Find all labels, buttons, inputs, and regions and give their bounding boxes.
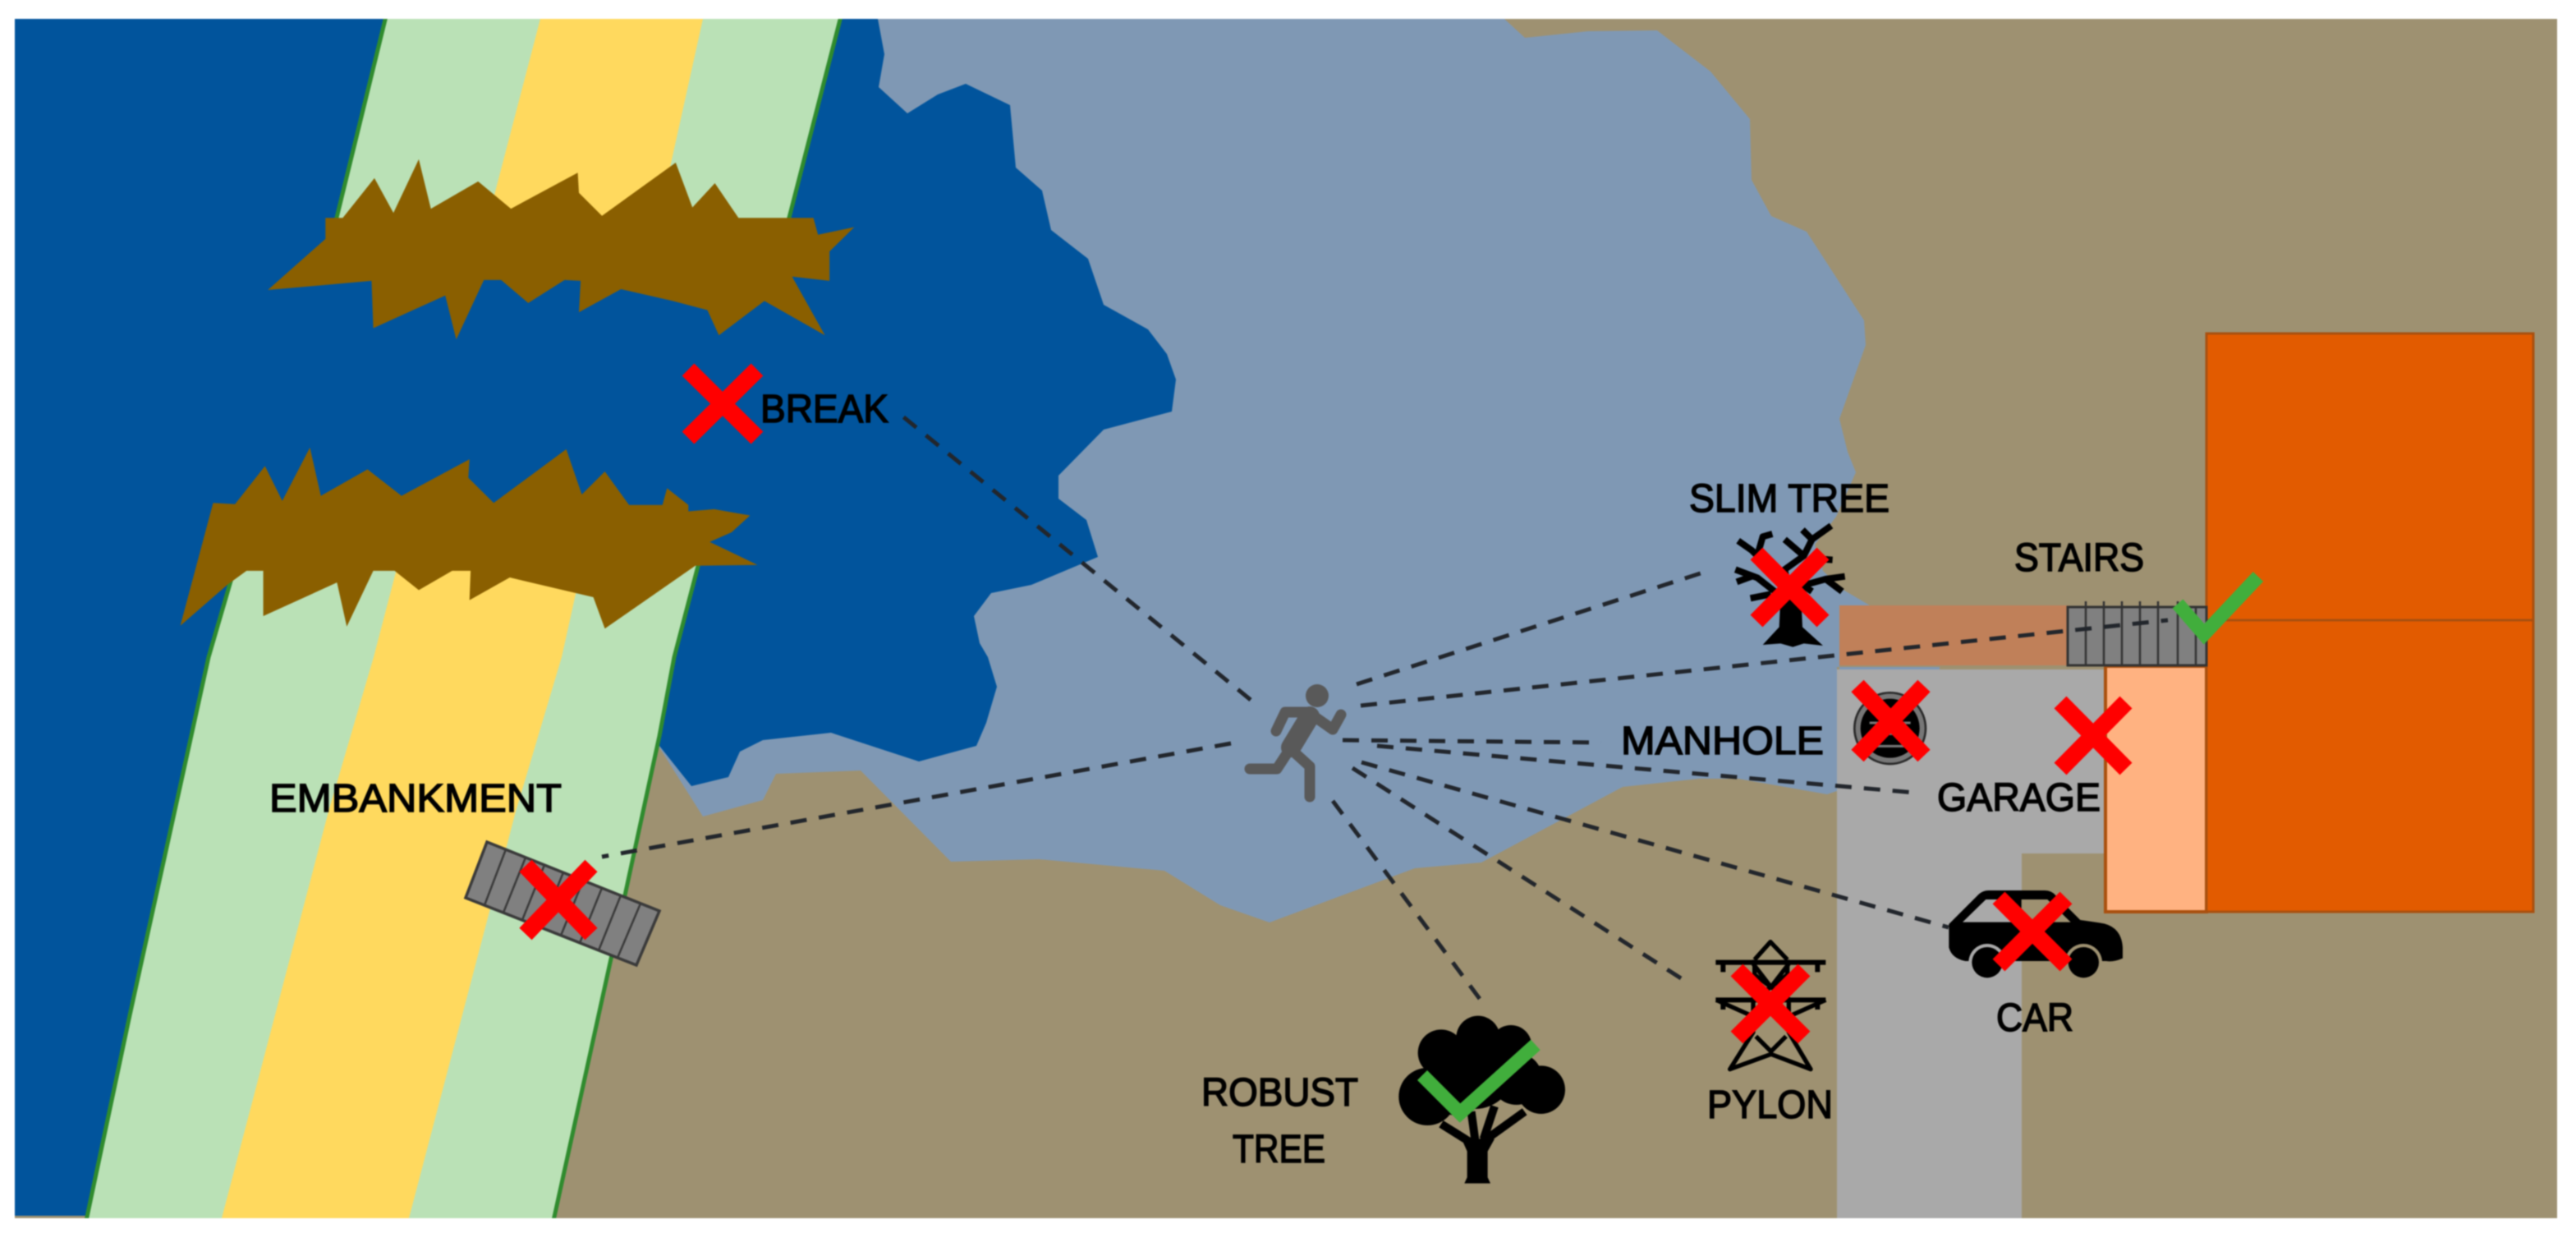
green check: stairs — [2178, 577, 2258, 634]
house — [2206, 334, 2533, 912]
upper breach edge — [268, 159, 854, 339]
label: stairs: STAIRS — [2014, 536, 2144, 580]
label: car: CAR — [1996, 996, 2073, 1040]
label: robust tree: ROBUST — [1201, 1071, 1358, 1115]
icon: pylon — [1715, 942, 1825, 1070]
labels — [269, 388, 2144, 1171]
embankment grass strip — [86, 16, 841, 1221]
road and driveway — [1837, 669, 2105, 1218]
red cross marks for unsafe options — [526, 370, 2126, 1037]
embankment stairs — [466, 842, 659, 965]
line to robust tree — [1333, 801, 1482, 1002]
dashed sight lines from person to options — [602, 412, 2168, 1002]
label: break: BREAK — [760, 388, 889, 431]
label: garage: GARAGE — [1937, 776, 2101, 820]
icon: running person — [1250, 684, 1341, 797]
lower floor — [2206, 620, 2533, 912]
shallow flood area — [641, 19, 1940, 922]
flooded terrace — [1839, 605, 2069, 665]
cross: pylon — [1737, 970, 1804, 1037]
cross: garage — [2060, 702, 2126, 769]
green check: robust tree — [1422, 1045, 1536, 1113]
icon: slim tree — [1735, 526, 1845, 647]
line to car — [1361, 762, 1949, 927]
icon: robust tree — [1398, 1016, 1565, 1184]
label: robust tree second line: TREE — [1233, 1128, 1325, 1171]
line to slim tree — [1357, 570, 1710, 684]
icon: manhole cover — [1854, 692, 1926, 764]
cross: car — [1999, 898, 2066, 965]
line to pylon — [1352, 768, 1690, 984]
line to garage — [1377, 746, 1915, 793]
stair treads — [2086, 601, 2196, 665]
embankment crest strip — [222, 19, 703, 1218]
cross: break — [688, 370, 757, 438]
deep water river and breach flow — [15, 19, 1176, 1216]
stairs to house — [2068, 601, 2206, 665]
label: embankment: EMBANKMENT — [269, 777, 562, 821]
label: slim tree: SLIM TREE — [1689, 477, 1890, 521]
label: manhole: MANHOLE — [1621, 720, 1824, 763]
line to stairs — [1361, 620, 2168, 706]
upper floor — [2206, 334, 2533, 620]
cross: embankment — [526, 866, 591, 934]
cross: slim tree — [1756, 554, 1823, 621]
icon: car — [1949, 890, 2123, 981]
label: pylon: PYLON — [1707, 1083, 1833, 1127]
line to break — [897, 412, 1251, 700]
garage — [2105, 666, 2206, 912]
line to manhole — [1343, 740, 1601, 743]
lower breach edge — [181, 448, 757, 628]
stair body — [466, 842, 659, 965]
stair body — [2068, 607, 2206, 665]
line to embankment — [602, 743, 1231, 857]
embankment — [86, 16, 841, 1221]
cross: manhole — [1857, 686, 1924, 756]
stair treads — [484, 849, 641, 958]
water flowing through the breach — [259, 279, 769, 513]
